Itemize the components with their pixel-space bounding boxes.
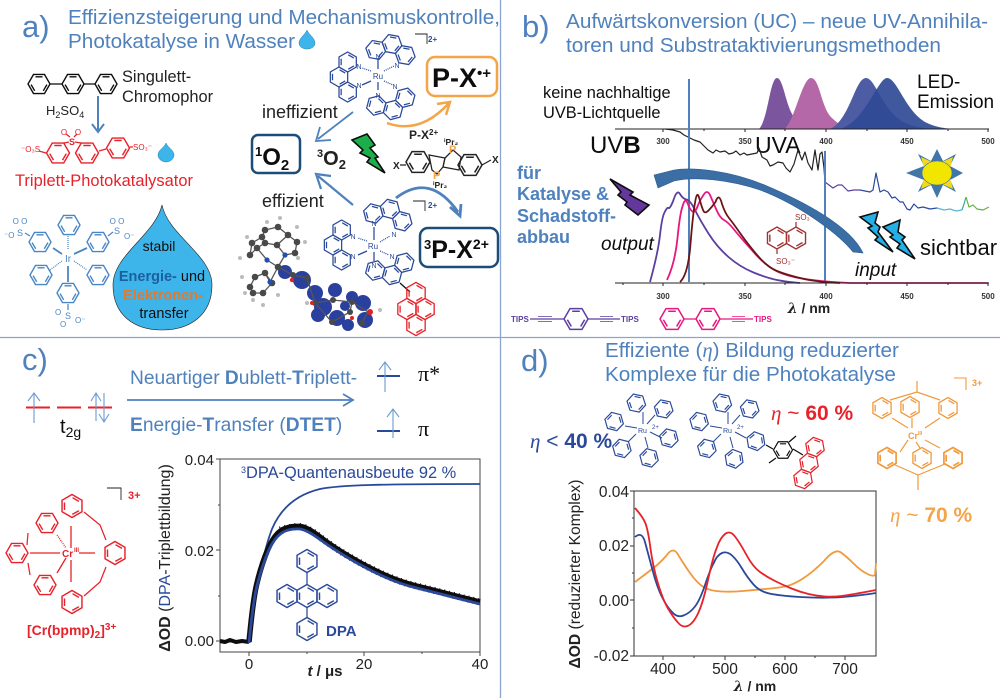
second Ru bipyridine complex with anthracene (689, 393, 768, 471)
box: singlet oxygen: 1 (255, 144, 262, 159)
upper Ru complex: N (356, 83, 362, 90)
box: radical cation P-X: •+ (477, 65, 491, 82)
line chart: reduced complex absorption: λ / nm (733, 678, 776, 695)
iridium complex: O O (13, 217, 27, 226)
label no UVB source: UVB-Lichtquelle (543, 104, 661, 122)
arrow: energy transfer (396, 188, 461, 216)
upper Ru complex: N (375, 93, 381, 100)
DPA molecule: DPA (326, 623, 357, 640)
iridium complex: Ir (65, 254, 72, 265)
line chart: DPA triplet formation: 0.04 (185, 452, 214, 469)
label eta below 40 percent: η < 40 % (530, 429, 613, 453)
big water drop callout: stabil (143, 238, 175, 254)
line chart: reduced complex absorption: 0.02 (599, 538, 629, 555)
panel letter a: a) (22, 9, 50, 44)
P-X dication molecule: X (393, 161, 400, 172)
wavelength boundaries (689, 79, 825, 283)
P-X dication molecule: ⁱPr₂ (433, 179, 447, 190)
box: radical cation P-X (427, 57, 497, 96)
charge label orange chromium: 3+ (972, 378, 982, 388)
arrow: sulfonation (92, 96, 104, 132)
top wavelength axis (615, 129, 995, 146)
line chart: reduced complex absorption: -0.02 (594, 648, 629, 665)
label LED emission: LED- (917, 72, 960, 93)
lower Ru complex: N (371, 221, 377, 228)
second Ru bipyridine complex with anthracene: 2+ (737, 425, 744, 431)
top wavelength axis: 300 (656, 137, 670, 146)
reagent sulfuric acid: SO (60, 103, 79, 118)
bottom wavelength axis: 450 (900, 292, 914, 301)
box: triplet P-X: P-X (431, 236, 473, 264)
charge label orange chromium (954, 378, 982, 390)
charge label chromium: 3+ (128, 490, 141, 502)
heading d: Effiziente (η) Bildung reduzierter (605, 339, 899, 362)
label P-X dication: P-X (409, 128, 429, 142)
iridium complex: O⁻ (75, 316, 85, 325)
first Ru bipyridine complex: Ru (638, 428, 647, 435)
label efficient: effizient (262, 191, 324, 211)
t2g energy levels: t (60, 416, 66, 438)
label chromium complex: ] (100, 622, 105, 638)
arrow: inefficient path (316, 112, 353, 141)
chromium complex (6, 492, 130, 616)
label triplet photocatalyst: Triplett-Photokatalysator (15, 172, 194, 190)
box: triplet P-X (420, 228, 498, 267)
line chart: reduced complex absorption: 400 (650, 661, 676, 678)
big water drop callout (113, 205, 212, 330)
iridium complex: S (65, 311, 71, 321)
lower Ru complex: N (350, 234, 356, 241)
iridium complex (4, 215, 134, 329)
bottom wavelength axis: 300 (656, 292, 670, 301)
label eta 70 percent: η ~ 70 % (890, 503, 973, 527)
pi level (377, 409, 429, 441)
first Ru bipyridine complex: 2+ (652, 425, 659, 431)
label singlet chromophore (122, 68, 214, 106)
t2g energy levels (26, 393, 112, 440)
arrow: orange electron transfer (387, 102, 450, 126)
icon: purple lightning (610, 179, 649, 215)
naphthalene disulfonate: SO₃⁻ (776, 257, 795, 266)
box: radical cation P-X: P-X (432, 63, 477, 93)
iridium complex: O O (110, 217, 124, 226)
arrow: efficient path (316, 174, 353, 205)
upper Ru complex (330, 31, 419, 125)
label eta 60 percent: η ~ 60 % (771, 401, 854, 425)
P-X dication molecule: P (433, 170, 440, 182)
top wavelength axis: 450 (900, 137, 914, 146)
line chart: reduced complex absorption: 500 (712, 661, 738, 678)
heading a (68, 6, 500, 53)
box: singlet oxygen (252, 135, 300, 174)
P-X dication molecule (393, 136, 499, 190)
line chart: DPA triplet formation: ΔOD (DPA-Triplettbildung) (157, 464, 174, 652)
label triplet oxygen: 3 (317, 148, 323, 160)
reagent sulfuric acid: H (46, 103, 55, 118)
label visible: sichtbar (920, 235, 997, 260)
anthracene substituent (791, 436, 827, 490)
chromium complex: III (74, 548, 79, 554)
top wavelength axis: 400 (819, 137, 833, 146)
bottom wavelength axis: 500 (981, 292, 995, 301)
triplet photocatalyst molecule: O (75, 128, 81, 137)
charge label upper Ru: 2+ (428, 35, 437, 44)
label catalysis use: Schadstoff- (517, 206, 616, 226)
heading c line two: Energie-Transfer (DTET) (130, 415, 342, 436)
upper Ru complex: N (356, 64, 362, 71)
line chart: DPA triplet formation: 0.02 (185, 543, 214, 560)
iridium complex: O⁻ (124, 232, 134, 241)
top wavelength axis: 350 (738, 137, 752, 146)
pi star level (377, 361, 440, 392)
label catalysis use: Katalyse & (517, 184, 609, 204)
label output: output (601, 234, 655, 255)
panel b: upconversion (511, 9, 997, 329)
line chart: reduced complex absorption: 0.00 (599, 593, 629, 610)
heading a: Photokatalyse in Wasser (68, 30, 295, 53)
heading b: toren und Substrataktivierungsmethoden (566, 34, 941, 57)
charge label upper Ru (415, 34, 437, 44)
solar spectrum (665, 129, 989, 211)
heading c line one: Neuartiger Dublett-Triplett- (130, 368, 357, 389)
triplet photocatalyst molecule: O (61, 128, 67, 137)
line chart: DPA triplet formation: 20 (356, 656, 372, 673)
iridium complex: S (114, 226, 120, 236)
icon: heading water drop (299, 30, 315, 49)
arrow: DTET (127, 394, 353, 406)
axis title wavelength: λ / nm (787, 300, 830, 317)
icon: blue lightning bolts (860, 212, 915, 259)
charge label lower Ru (413, 201, 437, 211)
label UVA: UVA (755, 132, 801, 158)
lower Ru complex: N (391, 232, 397, 239)
pink TIPS annihilator: TIPS (754, 315, 772, 324)
charge label chromium (107, 488, 141, 502)
P-X dication molecule: X (492, 155, 499, 166)
line chart: reduced complex absorption: 0.04 (599, 484, 629, 501)
purple TIPS annihilator: TIPS (511, 315, 529, 324)
label no UVB source (543, 84, 671, 122)
naphthalene disulfonate (763, 213, 814, 266)
label LED emission (917, 72, 994, 113)
line chart: DPA triplet formation: DPA-Quantenausbeute 92 % (246, 464, 456, 482)
lower Ru complex: Ru (368, 242, 378, 251)
label input: input (855, 260, 897, 281)
lower Ru complex: N (371, 263, 377, 270)
label catalysis use (517, 163, 616, 247)
bottom wavelength axis: 350 (738, 292, 752, 301)
reagent sulfuric acid: 2 (55, 110, 60, 120)
label catalysis use: für (517, 163, 541, 183)
panel letter b: b) (522, 9, 550, 44)
arrow: big upconversion arc (654, 169, 863, 253)
3D molecular orbital model (238, 216, 382, 331)
label chromium complex: [Cr(bpmp) (27, 622, 95, 638)
orange chromium complex: III (918, 431, 923, 437)
naphthalene disulfonate: SO₃⁻ (795, 213, 814, 222)
P-X dication molecule: ⁱPr₂ (444, 136, 458, 147)
iridium complex: ⁻O (4, 231, 14, 240)
pink TIPS annihilator (660, 309, 772, 329)
line chart: reduced complex absorption: 600 (772, 661, 798, 678)
label triplet oxygen: O (323, 148, 339, 170)
chromium complex: Cr (62, 549, 73, 560)
lower Ru complex (324, 194, 418, 290)
iridium complex: O (55, 308, 61, 317)
iridium complex: O (60, 320, 66, 329)
charge label lower Ru: 2+ (428, 201, 437, 210)
label P-X dication: 2+ (429, 128, 438, 137)
emission output curves (650, 192, 988, 283)
label LED emission: Emission (917, 92, 994, 113)
xylene linker (766, 436, 803, 463)
heading b (566, 10, 988, 57)
big water drop callout: Energie- und (119, 269, 205, 285)
box: triplet P-X: 3 (424, 237, 431, 252)
P-X dication molecule: P (449, 144, 456, 156)
label singlet chromophore: Chromophor (122, 88, 214, 106)
heading b: Aufwärtskonversion (UC) – neue UV-Annihila- (566, 10, 988, 33)
line chart: reduced complex absorption: ΔOD (reduzierter Komplex) (567, 480, 584, 668)
panel d: reduced complexes (521, 339, 982, 695)
triplet photocatalyst molecule: ⁻O₃S (21, 145, 40, 154)
purple TIPS annihilator: TIPS (621, 315, 639, 324)
label triplet oxygen: 2 (339, 157, 346, 172)
line chart: DPA triplet formation: 0.00 (185, 633, 214, 650)
DPA molecule (272, 547, 357, 643)
icon: small water drop (158, 143, 174, 162)
t2g energy levels: 2g (66, 424, 81, 440)
box: singlet oxygen: 2 (281, 157, 289, 174)
label chromium complex: 2 (95, 630, 101, 641)
big water drop callout: Elektronen- (123, 288, 203, 304)
orange chromium complex (868, 381, 967, 490)
upper Ru complex: N (375, 54, 381, 61)
bottom wavelength axis (615, 283, 995, 301)
line chart: DPA triplet formation: t / μs (307, 663, 343, 680)
upper Ru complex: Ru (373, 72, 383, 81)
upper Ru complex: N (394, 63, 400, 70)
bottom wavelength axis: 400 (819, 292, 833, 301)
singlet chromophore terphenyl (28, 74, 117, 94)
line chart: DPA triplet formation: 0 (245, 656, 253, 673)
triplet photocatalyst molecule: SO₃⁻ (133, 143, 152, 152)
label catalysis use: abbau (517, 227, 570, 247)
reagent sulfuric acid: 4 (79, 110, 84, 120)
label UVB: UVB (590, 132, 641, 159)
orange chromium complex: Cr (908, 431, 918, 441)
purple TIPS annihilator (511, 309, 639, 329)
triplet photocatalyst molecule (21, 128, 152, 163)
line chart: DPA triplet formation: 3 (241, 465, 246, 475)
second Ru bipyridine complex with anthracene: Ru (723, 428, 732, 435)
line chart: DPA triplet formation: 40 (472, 656, 488, 673)
box: triplet P-X: 2+ (473, 236, 489, 252)
pyrene substituent (393, 280, 439, 338)
line chart: reduced complex absorption (567, 480, 876, 695)
icon: green lightning (352, 134, 385, 173)
box: singlet oxygen: O (262, 144, 281, 171)
triplet photocatalyst molecule: S (69, 137, 75, 147)
first Ru bipyridine complex (604, 393, 681, 470)
heading d (605, 339, 899, 386)
pi level: π (418, 416, 429, 441)
upper Ru complex: N (392, 84, 398, 91)
heading d: Komplexe für die Photokatalyse (605, 363, 896, 386)
line chart: DPA triplet formation (157, 452, 488, 680)
LED emission peaks (759, 78, 958, 129)
heading a: Effizienzsteigerung und Mechanismuskontrolle, (68, 6, 500, 29)
label singlet chromophore: Singulett- (122, 68, 191, 86)
panel letter c: c) (22, 342, 48, 377)
label chromium complex: 3+ (105, 622, 116, 633)
lower Ru complex: N (389, 254, 395, 261)
line chart: reduced complex absorption: 700 (832, 661, 858, 678)
panel a: photocatalysis in water (4, 6, 500, 338)
lower Ru complex: N (350, 254, 356, 261)
icon: sun (906, 149, 963, 198)
panel c: doublet triplet energy transfer (6, 342, 488, 680)
top wavelength axis: 500 (981, 137, 995, 146)
pi star level: π* (418, 361, 440, 386)
label no UVB source: keine nachhaltige (543, 84, 671, 102)
panel letter d: d) (521, 343, 549, 378)
big water drop callout: transfer (139, 306, 189, 322)
iridium complex: S (17, 228, 23, 238)
label inefficient: ineffizient (262, 102, 338, 122)
